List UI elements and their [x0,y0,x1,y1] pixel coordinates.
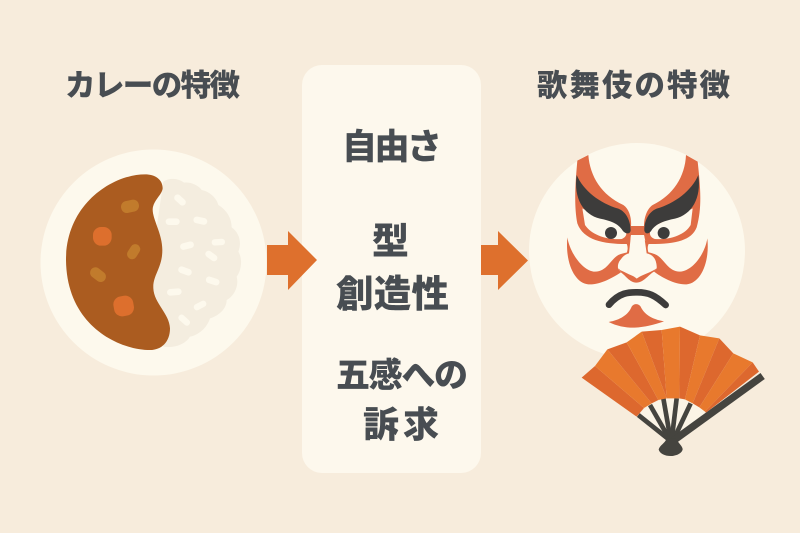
rice [150,179,241,347]
nose side strips [626,240,649,255]
paper gap behind ribs [638,398,706,441]
fan leaf segments [582,366,644,417]
icon: kabuki face [529,143,745,359]
arrow: curry to traits [267,231,317,290]
text: appeal to the five senses, line 2: 訴求 [363,404,439,445]
forehead and eye kumadori [575,155,700,244]
icon: curry rice plate [40,150,266,376]
icon: folding fan [582,327,763,456]
curry sauce [66,174,170,350]
eyes [605,227,617,239]
nose [619,235,656,279]
under-nose line [618,268,657,283]
fan handle [659,438,683,456]
left cheek line [567,237,628,284]
text: form: 型 [372,221,409,262]
right cheek line [647,238,708,284]
panel: shared traits [302,65,481,473]
frowning mouth [609,292,666,305]
beard [609,304,664,328]
text: freedom: 自由さ [342,128,442,167]
text: creativity: 創造性 [336,273,449,315]
rice grains [166,193,225,327]
eye whites [582,208,626,239]
heading: curry features: カレーの特徴 [65,69,240,103]
text: appeal to the five senses, line 1: 五感への [336,356,468,395]
heading: kabuki features: 歌舞伎の特徴 [537,69,730,103]
fan ribs [638,376,763,442]
curry vegetables [88,199,142,318]
arrow: traits to kabuki [481,231,528,290]
bridge [630,226,645,235]
eyebrows [576,175,631,233]
